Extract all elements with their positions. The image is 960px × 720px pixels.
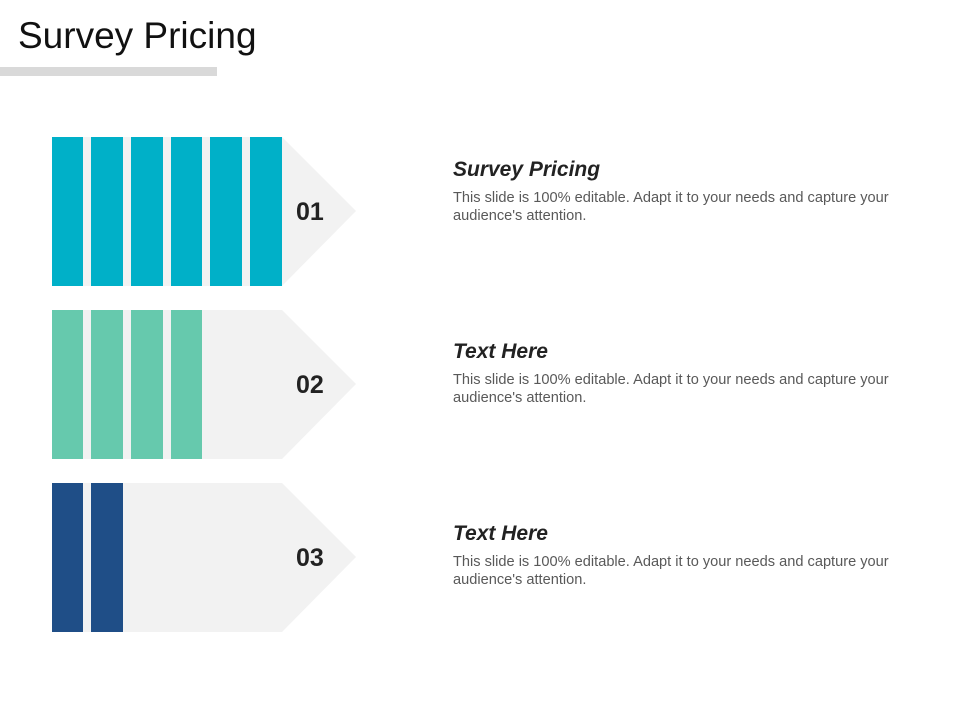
title underline bar (0, 67, 217, 76)
row 1 arrow (52, 137, 356, 286)
row 2 arrow (52, 310, 356, 459)
number 01: 01 (296, 198, 324, 226)
text block 1 (453, 158, 889, 224)
text block 2 (453, 340, 889, 406)
text block 3 (453, 522, 889, 588)
text block 3: Text Here (453, 522, 548, 545)
number 03: 03 (296, 544, 324, 572)
text block 2: This slide is 100% editable. Adapt it to your needs and capture your audience's attention. (453, 372, 889, 406)
text block 3: This slide is 100% editable. Adapt it to your needs and capture your audience's attention. (453, 554, 889, 588)
row 3 arrow (52, 483, 356, 632)
text block 1: Survey Pricing (453, 158, 600, 181)
number 02: 02 (296, 371, 324, 399)
text block 1: This slide is 100% editable. Adapt it to your needs and capture your audience's attention. (453, 190, 889, 224)
text block 2: Text Here (453, 340, 548, 363)
title: Survey Pricing (18, 15, 257, 56)
